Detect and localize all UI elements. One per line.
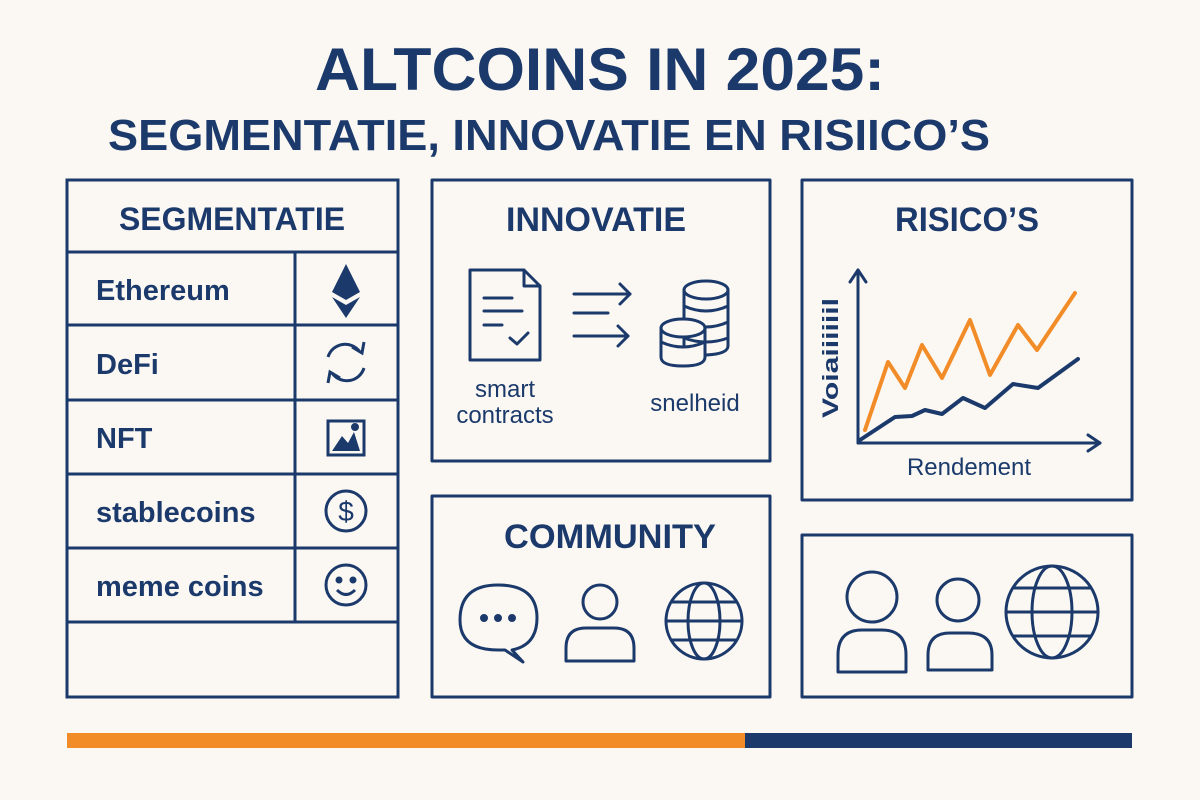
chart bbox=[818, 270, 1100, 481]
heading: innovatie: INNOVATIE bbox=[506, 201, 686, 239]
row labels: meme coins bbox=[96, 571, 264, 603]
heading: community: COMMUNITY bbox=[504, 518, 716, 556]
panel: community bbox=[432, 496, 770, 697]
icon: smiley bbox=[326, 565, 366, 605]
labels: contracts bbox=[456, 402, 554, 429]
row labels bbox=[96, 275, 264, 603]
title bbox=[108, 36, 990, 160]
icon: document bbox=[470, 270, 540, 360]
labels: smart bbox=[475, 376, 535, 403]
panel: risicos bbox=[802, 180, 1132, 500]
icon: two persons bbox=[838, 572, 992, 672]
icon: image bbox=[328, 421, 364, 455]
chart: Rendement bbox=[907, 454, 1031, 481]
icon: chat bbox=[460, 585, 537, 662]
bottom bar bbox=[67, 733, 1132, 748]
labels: snelheid bbox=[650, 390, 740, 417]
icon: globe bbox=[666, 583, 742, 659]
heading: risicos: RISICO’S bbox=[895, 201, 1039, 239]
row labels: stablecoins bbox=[96, 497, 256, 529]
panel: innovatie bbox=[432, 180, 770, 461]
chart: Voiaiiiiiil bbox=[818, 298, 843, 418]
labels bbox=[456, 376, 740, 429]
panel: segmentatie bbox=[67, 180, 398, 697]
panel: people bbox=[802, 535, 1132, 697]
icon: dollar bbox=[326, 491, 366, 531]
arrows bbox=[574, 284, 630, 346]
icon: dollar: $ bbox=[338, 496, 354, 527]
icon: globe bbox=[1006, 566, 1098, 658]
row labels: DeFi bbox=[96, 349, 159, 381]
icon: ethereum bbox=[332, 264, 360, 318]
icon: coins bbox=[661, 281, 728, 366]
row labels: NFT bbox=[96, 423, 153, 455]
row labels: Ethereum bbox=[96, 275, 230, 307]
title: SEGMENTATIE, INNOVATIE EN RISIICO’S bbox=[108, 111, 990, 160]
heading: segmentatie: SEGMENTATIE bbox=[119, 201, 345, 237]
icon: person bbox=[566, 585, 634, 661]
title: ALTCOINS IN 2025: bbox=[315, 36, 885, 103]
icon: refresh bbox=[328, 342, 364, 383]
